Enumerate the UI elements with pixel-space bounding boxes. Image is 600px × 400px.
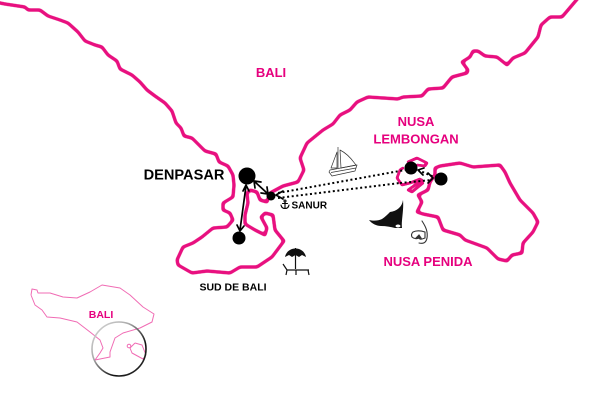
- island: Nusa Lembongan: [397, 158, 427, 192]
- marker: Sud de Bali: [232, 232, 246, 244]
- main island coast: Bali: [0, 0, 579, 273]
- inset label: BALI: [89, 309, 113, 321]
- icon: manta ray: [369, 200, 403, 228]
- inset zoom ring: [92, 322, 146, 376]
- route: dotted ferry lines: [278, 170, 434, 198]
- marker: Denpasar: [238, 168, 256, 184]
- marker: Nusa Penida: [434, 172, 448, 186]
- label: Sud de Bali: SUD DE BALI: [199, 282, 267, 294]
- marker: Nusa Lembongan: [404, 162, 418, 174]
- inset Lembongan: [127, 344, 131, 348]
- label: Nusa Lembongan: NUSA: [398, 114, 435, 129]
- label: Nusa Penida: NUSA PENIDA: [383, 254, 473, 269]
- route arrows: [237, 168, 433, 231]
- label: Denpasar: DENPASAR: [144, 168, 225, 184]
- label: Sanur: SANUR: [292, 200, 328, 212]
- icon: beach umbrella and lounger: [283, 248, 309, 275]
- label: Bali: BALI: [256, 65, 286, 80]
- inset Nusa Penida: [130, 343, 146, 359]
- icon: anchor: [281, 200, 289, 208]
- label: Nusa Lembongan: LEMBONGAN: [373, 132, 459, 146]
- icon: sailboat: [329, 147, 357, 176]
- coastline: Bali and southern peninsula: [0, 0, 579, 273]
- marker: Sanur: [266, 192, 276, 200]
- icon: snorkel mask: [412, 221, 427, 243]
- inset map: Bali overview: [31, 285, 154, 376]
- inset coastline: [31, 285, 154, 360]
- island: Nusa Penida: [417, 163, 538, 261]
